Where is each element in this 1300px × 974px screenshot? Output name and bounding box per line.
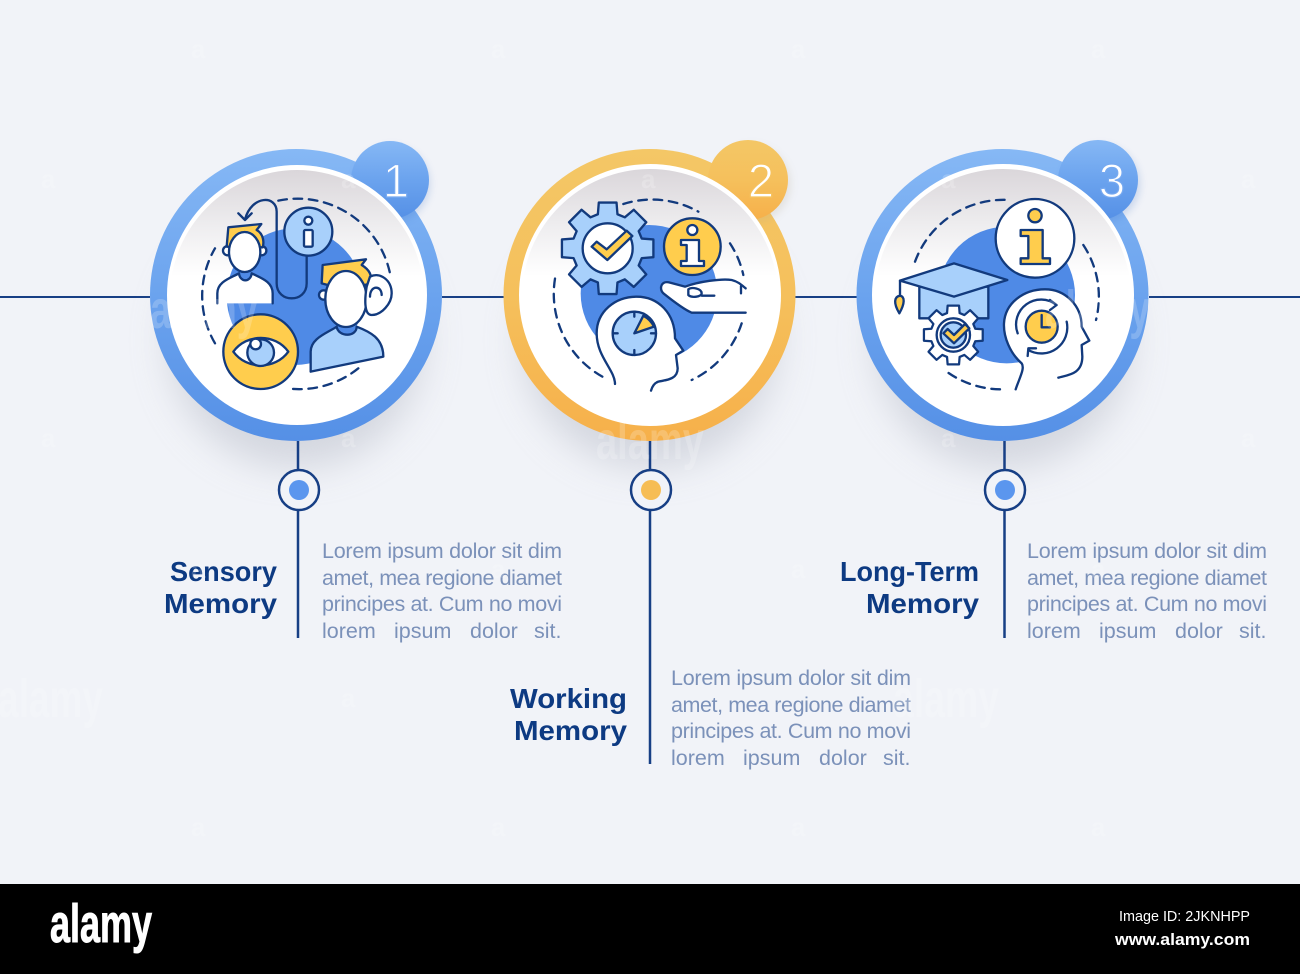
watermark overlay: a — [341, 683, 356, 713]
text block 3: amet, mea regione diamet — [1027, 566, 1267, 590]
heading: Long-Term Memory: Long-Term — [840, 556, 979, 587]
watermark overlay: a — [791, 812, 806, 842]
badge 2 — [519, 140, 791, 426]
watermark overlay: a — [1241, 164, 1256, 194]
text block 2: Lorem ipsum dolor sit dim — [671, 666, 911, 690]
clock — [613, 312, 656, 355]
text block 3: ipsum — [1099, 619, 1156, 643]
watermark overlay: alamy — [1045, 280, 1150, 340]
panel: step 3 circle — [856, 140, 1148, 468]
head — [597, 297, 683, 391]
panel: step 2 circle — [504, 140, 796, 468]
watermark overlay: a — [1091, 554, 1106, 584]
text block 3: sit. — [1239, 619, 1266, 643]
heading: Long-Term Memory: Memory — [866, 588, 979, 619]
gear — [924, 306, 983, 364]
connector and marker 1 — [279, 441, 319, 638]
watermark overlay: a — [941, 164, 956, 194]
text block 2: lorem — [671, 746, 725, 770]
text block 1: lorem — [322, 619, 376, 643]
heading: Sensory Memory: Sensory — [170, 556, 277, 587]
watermark overlay: alamy — [150, 280, 258, 340]
watermark overlay: a — [191, 812, 206, 842]
info — [996, 199, 1074, 278]
watermark overlay: a — [791, 34, 806, 64]
connector and marker 2 — [631, 441, 671, 764]
watermark overlay: a — [41, 164, 56, 194]
clock — [1026, 311, 1058, 343]
graduation cap — [919, 287, 988, 318]
watermark overlay: a — [341, 164, 356, 194]
icon: working memory — [554, 200, 746, 391]
footer logo: alamy — [50, 894, 152, 954]
head — [1004, 289, 1089, 389]
footer url: www.alamy.com — [1114, 930, 1250, 949]
icon: long-term memory — [895, 199, 1099, 389]
gear — [562, 203, 653, 294]
text block 1 — [322, 539, 562, 643]
watermark overlay: a — [341, 423, 356, 453]
badge 3 — [872, 140, 1140, 426]
watermark overlay: a — [641, 164, 656, 194]
watermark overlay: alamy — [596, 411, 704, 471]
eye — [223, 314, 298, 389]
watermark overlay: alamy — [893, 669, 999, 729]
text block 3: principes at. Cum no movi — [1027, 592, 1267, 616]
watermark overlay: a — [191, 34, 206, 64]
text block 2: principes at. Cum no movi — [671, 719, 911, 743]
text block 1: amet, mea regione diamet — [322, 566, 562, 590]
text block 1: sit. — [534, 619, 561, 643]
footer image id: Image ID: 2JKNHPP — [1119, 908, 1250, 925]
text block 1: Lorem ipsum dolor sit dim — [322, 539, 562, 563]
text block 2 — [671, 666, 911, 770]
watermark overlay: alamy — [0, 669, 103, 729]
badge 2: 2 — [748, 154, 774, 207]
person right — [311, 327, 383, 372]
text block 2: sit. — [883, 746, 910, 770]
heading: Working Memory — [510, 683, 627, 746]
watermark overlay: a — [1091, 812, 1106, 842]
text block 3: dolor — [1175, 619, 1223, 643]
text block 3: lorem — [1027, 619, 1081, 643]
text block 3 — [1027, 539, 1267, 643]
watermark overlay: a — [491, 34, 506, 64]
text block 1: dolor — [470, 619, 518, 643]
watermark overlay: a — [791, 554, 806, 584]
text block 3: Lorem ipsum dolor sit dim — [1027, 539, 1267, 563]
person left — [217, 273, 273, 303]
watermark overlay: a — [1091, 34, 1106, 64]
text block 2: ipsum — [743, 746, 800, 770]
watermark overlay: a — [41, 423, 56, 453]
watermark overlay: a — [941, 423, 956, 453]
watermark overlay: a — [491, 812, 506, 842]
watermark overlay: a — [1241, 423, 1256, 453]
connector and marker 3 — [985, 441, 1025, 638]
badge 1 — [167, 141, 430, 425]
text block 2: amet, mea regione diamet — [671, 693, 911, 717]
info — [664, 218, 721, 275]
heading: Working Memory: Working — [510, 683, 627, 714]
icon: sensory memory — [202, 199, 392, 389]
badge 1: 1 — [383, 154, 409, 207]
badge 3: 3 — [1099, 154, 1125, 207]
text block 1: principes at. Cum no movi — [322, 592, 562, 616]
heading: Working Memory: Memory — [514, 715, 627, 746]
heading: Long-Term Memory — [840, 556, 979, 619]
panel: step 1 circle — [150, 141, 442, 468]
horizontal timeline line — [0, 296, 1300, 298]
info bubble — [284, 208, 332, 256]
text block 2: dolor — [819, 746, 867, 770]
text block 1: ipsum — [394, 619, 451, 643]
watermark overlay: a — [491, 554, 506, 584]
heading: Sensory Memory: Memory — [164, 588, 277, 619]
tube and arrow — [238, 200, 307, 298]
watermark overlay: a — [191, 554, 206, 584]
hand — [661, 280, 746, 313]
footer bar — [0, 884, 1300, 974]
heading: Sensory Memory — [164, 556, 277, 619]
